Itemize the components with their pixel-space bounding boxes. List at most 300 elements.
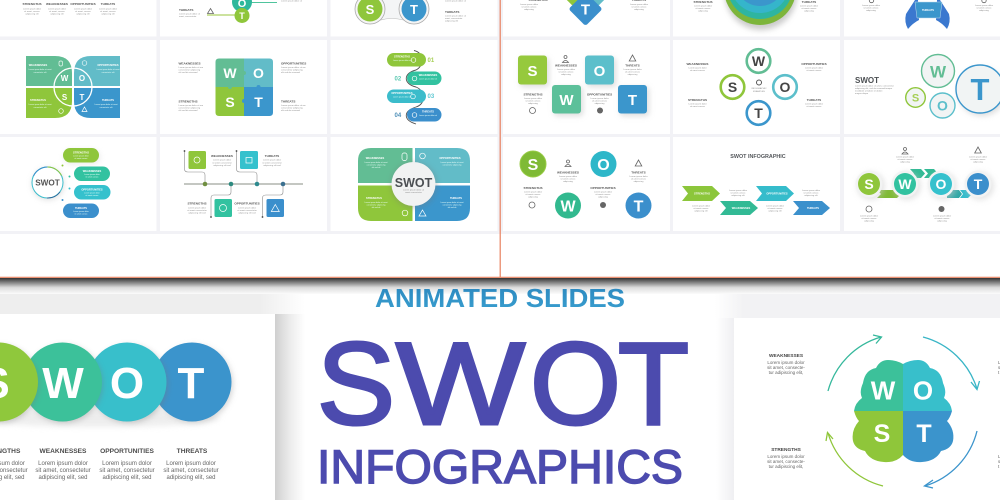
- slide: sized bubbles: SWOT: [855, 76, 879, 85]
- slide: puzzle square: Lorem ipsum dolor sit am: [281, 66, 306, 69]
- slide: chained ring circles: adipiscing: [900, 162, 911, 164]
- slide: SWOT columns fragment: Lorem ipsum dolor: [23, 8, 41, 10]
- slide: timeline with squares: Lorem ipsum dolor: [213, 158, 231, 162]
- slide: ring letters: WEAKNESSES: [686, 62, 709, 66]
- slide: winding pills: WEAKNESSES: [419, 73, 437, 77]
- slide: diamonds fragment: T: [581, 2, 590, 18]
- slide: filled circles: Lorem ipsum dolor: [629, 175, 648, 178]
- slide: timeline with squares: [160, 137, 327, 231]
- slide: puzzle square: consectetur adipiscing: [281, 68, 303, 72]
- arrow: opportunities to threats: [923, 337, 980, 390]
- column: weaknesses: adipiscing elit, sed: [38, 475, 88, 481]
- slide: rounded square tiles: Lorem ipsum dolor: [623, 68, 642, 71]
- column: weaknesses: sit amet, consectetur: [35, 468, 91, 474]
- slide: ring letters: STRENGTHS: [688, 98, 707, 102]
- slide: rounded quadrants with SWOT hub: Lorem ipsum dolor sit amet: [441, 201, 464, 204]
- slide: concentric circles fragment: THREATS: [802, 0, 816, 4]
- slide: rounded quadrants with SWOT hub: STRENGTHS: [366, 196, 382, 200]
- slide: chevron arrows: sit amet consec: [693, 207, 710, 210]
- slide: chained ring circles: W: [898, 176, 912, 192]
- slide: puzzle square: STRENGTHS: [178, 100, 198, 104]
- slide: sized bubbles: S: [912, 92, 919, 104]
- slide: quadrants with ring: T: [80, 93, 85, 102]
- slide: diamonds fragment: adipiscing: [524, 9, 535, 11]
- slide: SWOT columns fragment: [0, 0, 156, 36]
- slide: chevron arrows: adipiscing elit: [768, 210, 782, 212]
- slide: timeline with squares: STRENGTHS: [187, 202, 207, 206]
- slide: linked rings fragment: amet, consectetur: [445, 17, 463, 20]
- slide: rounded square tiles: sit amet consec: [592, 100, 608, 102]
- slide: rounded square tiles: STRENGTHS: [523, 92, 543, 96]
- slide: concentric circles fragment: adipiscing: [698, 10, 709, 12]
- slide: diamonds fragment: sit amet consec: [631, 6, 648, 8]
- slide: concentric circles fragment: Lorem ipsum dolor: [800, 4, 818, 8]
- slide: SWOT hub with pills: THREATS: [75, 206, 87, 210]
- slide: timeline with squares: sit amet consectetur: [187, 209, 207, 212]
- slide: quadrants with ring: W: [61, 74, 69, 83]
- label: weaknesses: [767, 353, 805, 375]
- slide: rounded quadrants with SWOT hub: Lorem ipsum dolor sit amet: [441, 161, 464, 164]
- slide: chained ring circles: adipiscing: [973, 162, 984, 164]
- slide: SWOT hub with pills: sit amet consec: [74, 157, 88, 160]
- slide: chained ring circles: Lorem ipsum dolor: [860, 214, 878, 218]
- slide: SWOT columns fragment: Lorem ipsum dolor: [99, 8, 117, 10]
- label: weaknesses: tur adipiscing elit,: [769, 370, 803, 375]
- label: strengths: tur adipiscing elit,: [769, 464, 803, 469]
- circle: W: [23, 342, 103, 423]
- slide: rounded quadrants with SWOT hub: elit sed do: [448, 206, 456, 209]
- slide: linked rings fragment: [330, 0, 498, 36]
- slide: rocket fragment: Lorem ipsum dolor: [862, 4, 880, 7]
- slide: SWOT hub with pills: OPPORTUNITIES: [81, 188, 103, 192]
- slide: puzzle square: consectetur adipiscing: [178, 68, 201, 72]
- slide: chained ring circles: Lorem ipsum dolor: [896, 156, 914, 158]
- slide: rounded square tiles: adipiscing: [528, 103, 539, 105]
- label: weaknesses: sit amet, consecte-: [767, 365, 805, 370]
- slide: diamonds fragment: Lorem ipsum dolor: [520, 3, 538, 6]
- slide: chevron arrows: THREATS: [807, 206, 819, 210]
- slide: timeline with squares: OPPORTUNITIES: [234, 202, 260, 206]
- slide: SWOT columns fragment: sit amet, consec: [100, 10, 117, 13]
- label: strengths: STRENGTHS: [771, 447, 802, 453]
- slide: chevron arrows: adipiscing elit: [731, 194, 745, 197]
- slide: filled circles: sit amet consec: [595, 193, 612, 196]
- slide: timeline with squares: sit amet consectetur: [262, 162, 282, 164]
- slide: winding pills: 01: [428, 58, 435, 64]
- column: weaknesses: [35, 448, 91, 481]
- slide: node chain fragment: Lorem ipsum dolor sit: [179, 12, 200, 16]
- column: opportunities: [99, 448, 155, 481]
- slide: sized bubbles: [844, 40, 1000, 134]
- brain: quadrant W: [854, 360, 903, 411]
- brain letters: S: [874, 420, 890, 448]
- slide: puzzle square: THREATS: [281, 100, 295, 104]
- slide: filled circles: T: [634, 198, 644, 216]
- slide: filled circles: STRENGTHS: [523, 186, 543, 190]
- slide: sized bubbles: T: [971, 72, 990, 107]
- right card shadow: left: [716, 318, 734, 500]
- slide: filled circles: Lorem ipsum dolor: [559, 175, 577, 178]
- title: SWOT: [317, 318, 689, 449]
- slide: timeline with squares: sit amet consectetur: [212, 162, 232, 164]
- slide: sized bubbles: W: [930, 62, 947, 82]
- slide: SWOT hub with pills: Lorem ipsum dolor: [84, 192, 100, 194]
- label: weaknesses: WEAKNESSES: [769, 353, 804, 359]
- arrow: strengths to weaknesses: [826, 432, 883, 486]
- slide: rounded square tiles: [503, 40, 670, 134]
- slide: chevron arrows: adipiscing elit: [694, 210, 708, 212]
- slide: SWOT hub with pills: WEAKNESSES: [83, 169, 101, 173]
- slide: timeline with squares: adipiscing elit sed: [238, 212, 256, 214]
- slide: chevron arrows: Lorem ipsum dolor: [692, 204, 710, 208]
- slide: quadrants with ring: STRENGTHS: [30, 98, 46, 102]
- slide: rocket fragment: [844, 0, 1000, 37]
- slide: SWOT hub with pills: Lorem ipsum dolor: [84, 173, 100, 176]
- slide: linked rings fragment: Lorem ipsum dolor sit: [445, 0, 466, 2]
- slide: sized bubbles: adipiscing elit, sed do eiusmod tempor: [855, 87, 892, 90]
- brain: quadrant T: [903, 411, 953, 462]
- slide: rounded quadrants with SWOT hub: WEAKNESSES: [366, 156, 384, 160]
- column: threats: [163, 448, 219, 481]
- slide: sized bubbles: Lorem ipsum dolor sit amet, consectetur: [855, 84, 894, 88]
- slide: rounded square tiles: Lorem ipsum dolor: [524, 97, 542, 100]
- slide: chevron arrows: Lorem ipsum dolor: [802, 189, 820, 192]
- slide: concentric circles fragment: STRENGTHS: [693, 0, 713, 4]
- slide: puzzle square: [160, 40, 327, 134]
- slide: quadrants with ring: WEAKNESSES: [29, 63, 47, 67]
- column: weaknesses: Lorem ipsum dolor: [38, 461, 88, 467]
- slide: sized bubbles: incididunt ut labore et dolore: [855, 90, 883, 92]
- slide: SWOT columns fragment: OPPORTUNITIES: [70, 2, 96, 6]
- slide: chained ring circles: Lorem ipsum dolor: [933, 214, 951, 218]
- slide: ring letters: S: [728, 79, 737, 95]
- slide: linked rings fragment: T: [410, 2, 418, 17]
- brain: quadrant S: [853, 411, 903, 462]
- slide: chained ring circles: adipiscing: [937, 220, 948, 222]
- slide: ring letters: EXAMPLES: [753, 90, 765, 93]
- slide: winding pills: 03: [428, 94, 435, 100]
- column: threats: THREATS: [177, 448, 208, 455]
- slide: puzzle square: T: [254, 94, 263, 110]
- slide: winding pills: STRENGTHS: [394, 54, 410, 58]
- slide: ring letters: W: [752, 53, 766, 69]
- slide: rounded square tiles: adipiscing: [628, 74, 638, 76]
- left card shadow: top: [0, 294, 305, 314]
- slide: linked rings fragment: THREATS: [445, 10, 459, 14]
- slide: timeline with squares: Lorem ipsum dolor: [263, 158, 281, 162]
- slide: puzzle square: elit sed do eiusmod: [281, 71, 301, 74]
- brain: quadrant O: [903, 360, 952, 411]
- column: opportunities: Lorem ipsum dolor: [102, 461, 152, 467]
- slide: rounded square tiles: THREATS: [625, 64, 640, 68]
- title: SWOT: T: [618, 318, 689, 449]
- column: threats: Lorem ipsum dolor: [166, 461, 216, 467]
- slide: quadrants with ring: consectetur elit: [34, 71, 47, 74]
- panel: right brain card: [734, 318, 1000, 500]
- slide: rounded square tiles: W: [559, 92, 574, 109]
- slide: timeline with squares: adipiscing elit sed: [263, 164, 281, 167]
- slide: rounded quadrants with SWOT hub: amet consectetur: [405, 191, 422, 194]
- slide: rounded quadrants with SWOT hub: OPPORTUNITIES: [439, 156, 461, 160]
- slide: filled circles: adipiscing: [598, 196, 609, 198]
- slide: chevron arrows: Lorem ipsum dolor: [766, 204, 784, 208]
- title: SWOT: S: [317, 318, 395, 449]
- slide: rounded quadrants with SWOT hub: consectetur adipiscing: [367, 164, 385, 166]
- slide: puzzle square: elit sed do eiusmod: [281, 109, 301, 112]
- title: SWOT: W: [396, 318, 526, 449]
- slide: SWOT columns fragment: STRENGTHS: [22, 2, 42, 6]
- slide: puzzle square: consectetur adipiscing: [281, 106, 303, 110]
- arrow: threats to strengths: [924, 431, 977, 488]
- slide: ring letters: sit amet consec: [806, 69, 823, 72]
- slide: rounded quadrants with SWOT hub: consectetur adipiscing: [443, 204, 461, 206]
- slide: SWOT columns fragment: WEAKNESSES: [46, 2, 68, 6]
- slide: SWOT columns fragment: adipiscing elit: [25, 12, 39, 16]
- slide: winding pills: OPPORTUNITIES: [391, 91, 413, 95]
- slide: timeline with squares: Lorem ipsum dolor: [188, 206, 206, 210]
- slide: filled circles: sit amet consec: [560, 178, 577, 180]
- slide: rounded quadrants with SWOT hub: Lorem ipsum dolor sit amet: [365, 201, 388, 204]
- slide: rounded square tiles: adipiscing: [561, 74, 572, 76]
- slide: rounded quadrants with SWOT hub: Lorem ipsum dolor sit: [403, 188, 424, 192]
- slide: concentric circles fragment: [673, 0, 840, 36]
- label: cut-off right column: t: [998, 370, 1000, 375]
- slide: filled circles: OPPORTUNITIES: [590, 186, 616, 190]
- slide: chevron arrows: sit amet consec: [767, 207, 784, 210]
- slide: rounded square tiles: sit amet consec: [558, 70, 575, 74]
- slide: rounded quadrants with SWOT hub: consectetur adipiscing: [367, 204, 385, 206]
- slide: ring letters: sit amet consec: [806, 105, 823, 108]
- arrow: weaknesses to opportunities: [828, 335, 882, 391]
- slide: filled circles: W: [560, 198, 576, 216]
- circle: O: [88, 342, 168, 423]
- slide: timeline with squares: WEAKNESSES: [211, 154, 233, 158]
- title: INFOGRAPHICS: INFOGRAPHICS: [317, 440, 683, 493]
- slide: timeline with squares: adipiscing elit sed: [213, 164, 231, 167]
- label: strengths: Lorem ipsum dolor: [767, 454, 805, 459]
- slide: node chain fragment: THREATS: [179, 8, 193, 12]
- slide: SWOT columns fragment: sit amet, consec: [49, 10, 66, 13]
- card shadow under circles: [0, 409, 220, 427]
- slide: ring letters: [673, 40, 840, 134]
- slide: puzzle square: WEAKNESSES: [178, 62, 201, 66]
- right card shadow: top: [715, 294, 1000, 318]
- label: weaknesses: Lorem ipsum dolor: [767, 360, 805, 365]
- slide: SWOT columns fragment: sit amet, consec: [24, 10, 41, 13]
- slide: node chain fragment: [160, 0, 327, 36]
- slide: rounded square tiles: adipiscing: [595, 103, 605, 105]
- slide: rounded quadrants with SWOT hub: [330, 137, 498, 231]
- slide: rounded quadrants with SWOT hub: elit sed do: [372, 166, 380, 169]
- slide: puzzle square: S: [225, 94, 235, 110]
- slide: winding pills: Lorem ipsum dolor sit: [393, 59, 412, 62]
- slide: rounded quadrants with SWOT hub: consectetur adipiscing: [443, 164, 461, 166]
- circle: S: [0, 342, 39, 423]
- slide: puzzle square: W: [223, 65, 237, 81]
- slide: SWOT columns fragment: adipiscing elit: [76, 12, 90, 16]
- slide: SWOT hub with pills: [0, 137, 156, 231]
- slide: puzzle square: O: [253, 65, 264, 81]
- slide: quadrants with ring: OPPORTUNITIES: [97, 63, 119, 67]
- brain letters: O: [913, 376, 933, 406]
- slide: winding pills: [330, 40, 498, 134]
- label: cut-off right column: t: [998, 464, 1000, 469]
- slide: winding pills: THREATS: [422, 110, 434, 114]
- slide: rounded square tiles: sit amet consec: [525, 100, 542, 102]
- left card shadow: right: [275, 314, 305, 500]
- slide: SWOT hub with pills: sit amet consec: [74, 212, 88, 216]
- column: weaknesses: WEAKNESSES: [40, 448, 87, 455]
- slide: filled circles: sit amet consec: [631, 178, 647, 180]
- slide: chevron arrows: WEAKNESSES: [732, 206, 750, 210]
- slide: ring letters: T: [754, 105, 763, 121]
- column: opportunities: sit amet, consectetur: [99, 468, 155, 474]
- slide: ring letters: THREATS: [807, 98, 821, 102]
- slide sheet: upper grid: [0, 0, 1000, 277]
- slide: filled circles: Lorem ipsum dolor: [594, 190, 612, 194]
- slide: SWOT hub with pills: sit amet consec: [85, 194, 99, 197]
- slide: chevron arrows: Lorem ipsum dolor: [729, 189, 747, 192]
- circle: O: O: [110, 359, 144, 408]
- slide: SWOT columns fragment: adipiscing elit: [50, 12, 64, 16]
- slide: rounded square tiles: S: [527, 63, 538, 80]
- slide: puzzle square: elit sed do eiusmod: [178, 71, 198, 74]
- column: opportunities: OPPORTUNITIES: [100, 448, 155, 455]
- slide: chevron arrows: sit amet consec: [730, 192, 747, 194]
- slide: puzzle square: consectetur adipiscing: [178, 106, 201, 110]
- slide: timeline with squares: sit amet consectetur: [237, 209, 257, 212]
- brain letters: W: [871, 376, 896, 406]
- slide: SWOT columns fragment: Lorem ipsum dolor: [74, 8, 92, 10]
- slide: SWOT hub with pills: Lorem ipsum dolor: [73, 154, 89, 158]
- slide: quadrants with ring: Lorem ipsum dolor sit amet: [29, 68, 52, 71]
- brain letters: [871, 376, 933, 448]
- slide: chevron arrows: sit amet consec: [803, 192, 820, 194]
- slide: rounded square tiles: OPPORTUNITIES: [587, 92, 612, 96]
- slide: filled circles: Lorem ipsum dolor: [524, 190, 542, 194]
- slide: diamonds fragment: Lorem ipsum dolor: [630, 3, 648, 6]
- slide: rounded quadrants with SWOT hub: elit sed do: [372, 206, 380, 209]
- slide: rocket fragment: sit amet consec: [863, 6, 880, 10]
- slide: SWOT hub with pills: Lorem ipsum dolor: [73, 210, 89, 213]
- slide: quadrants with ring: Lorem ipsum dolor sit amet: [29, 103, 52, 106]
- slide: ring letters: sit amet consec: [690, 105, 706, 108]
- slide: SWOT columns fragment: adipiscing elit: [101, 12, 115, 16]
- slide: node chain fragment: amet, consectetur: [179, 15, 197, 18]
- slide: quadrants with ring: S: [62, 93, 68, 102]
- slide: chevron arrows: SWOT INFOGRAPHIC: [730, 154, 786, 160]
- sheet drop shadow: [0, 278, 1000, 294]
- slide: quadrants with ring: consectetur elit: [34, 106, 47, 109]
- slide: winding pills: 04: [394, 113, 402, 119]
- slide: concentric circles fragment: sit amet consec: [801, 7, 818, 10]
- slide: sized bubbles: magna aliqua: [855, 93, 869, 95]
- column: threats: sit amet, consectetur: [163, 468, 219, 474]
- slide: rocket fragment: sit amet consec: [976, 6, 993, 10]
- slide: concentric circles fragment: Lorem ipsum dolor: [694, 4, 712, 8]
- slide: SWOT hub with pills: sit amet consec: [85, 176, 99, 178]
- slide: quadrants with ring: THREATS: [102, 98, 114, 102]
- slide: puzzle square: Lorem ipsum dolor sit am: [178, 104, 203, 107]
- panel: left SWOT circles card: [0, 314, 275, 500]
- slide: chevron arrows: adipiscing elit: [804, 194, 818, 197]
- slide: filled circles: adipiscing: [634, 181, 644, 183]
- slide: rounded quadrants with SWOT hub: SWOT: [395, 176, 433, 190]
- slide: chained ring circles: T: [974, 176, 983, 192]
- slide: chevron arrows: STRENGTHS: [694, 192, 710, 196]
- slide: quadrants with ring: consectetur elit: [102, 71, 115, 74]
- slide: ring letters: O: [780, 79, 791, 95]
- slide: chained ring circles: O: [936, 176, 947, 192]
- slide: rounded square tiles: sit amet consec: [625, 70, 641, 74]
- slide: quadrants with ring: O: [79, 74, 85, 83]
- slide: node chain fragment: Lorem ipsum dolor sit: [281, 0, 302, 2]
- slide: timeline with squares: THREATS: [265, 154, 279, 158]
- slide: rounded square tiles: O: [594, 63, 606, 80]
- slide: ring letters: Lorem ipsum dolor: [805, 66, 823, 70]
- slide: rounded square tiles: Lorem ipsum dolor: [557, 68, 575, 71]
- slide: filled circles: [503, 137, 670, 231]
- slide: rounded square tiles: WEAKNESSES: [555, 64, 577, 68]
- slide: chevron arrows: [673, 137, 840, 231]
- circle: W: W: [42, 359, 84, 408]
- brain letters: T: [916, 420, 932, 448]
- slide: chevron arrows: OPPORTUNITIES: [766, 192, 788, 196]
- slide: ring letters: Lorem ipsum dolor: [688, 66, 707, 70]
- slide: filled circles: THREATS: [631, 170, 646, 174]
- slide: linked rings fragment: S: [366, 2, 375, 17]
- slide: sized bubbles: O: [937, 98, 948, 114]
- column: strengths: [0, 448, 28, 481]
- slide: rocket fragment: Lorem ipsum dolor: [975, 4, 993, 7]
- subtitle: ANIMATED SLIDES: [375, 283, 625, 313]
- slide: ring letters: sit amet consec: [690, 69, 706, 72]
- slide: ring letters: Lorem ipsum dolor: [805, 102, 823, 106]
- slide: puzzle square: OPPORTUNITIES: [281, 62, 306, 66]
- label: strengths: sit amet, consecte-: [767, 459, 805, 464]
- slide: rounded square tiles: T: [628, 92, 637, 109]
- slide: winding pills: Lorem ipsum dolor sit: [393, 96, 412, 98]
- slide: linked rings fragment: Lorem ipsum dolor sit: [445, 14, 466, 18]
- slide: quadrants with ring: consectetur elit: [100, 106, 113, 109]
- slide: puzzle square: Lorem ipsum dolor sit am: [178, 66, 203, 69]
- slide: SWOT columns fragment: THREATS: [101, 2, 115, 6]
- slide: filled circles: O: [597, 157, 610, 174]
- slide: chained ring circles: sit amet consec: [970, 158, 987, 161]
- slide: filled circles: sit amet consec: [525, 193, 542, 196]
- label: cut-off right column: [998, 360, 1000, 469]
- column: opportunities: adipiscing elit, sed: [102, 475, 152, 481]
- slide: rounded quadrants with SWOT hub: Lorem ipsum dolor sit amet: [365, 161, 388, 164]
- slide: linked rings fragment: adipiscing elit: [445, 20, 459, 22]
- slide: SWOT columns fragment: sit amet, consec: [75, 10, 92, 13]
- slide: ring letters: INFOGRAPHIC: [751, 87, 767, 90]
- slide: quadrants with ring: Lorem ipsum dolor sit amet: [97, 68, 120, 71]
- slide: filled circles: S: [528, 157, 539, 174]
- slide: quadrants with ring: [0, 40, 156, 134]
- slide: node chain fragment: T: [239, 11, 245, 21]
- slide: chained ring circles: adipiscing: [864, 220, 875, 222]
- slide: quadrants with ring: Lorem ipsum dolor sit amet: [95, 103, 118, 106]
- sheet divider and bottom edge: [0, 0, 1000, 277]
- slide: diamonds fragment: sit amet consec: [521, 6, 538, 8]
- slide: winding pills: 02: [394, 76, 402, 82]
- slide: filled circles: adipiscing: [563, 181, 574, 183]
- slide: chained ring circles: sit amet consec: [934, 217, 951, 220]
- slide: rocket fragment: adipiscing: [866, 10, 877, 12]
- slide: winding pills: Lorem ipsum dolor sit: [419, 114, 438, 117]
- slide: rounded quadrants with SWOT hub: THREATS: [450, 196, 462, 200]
